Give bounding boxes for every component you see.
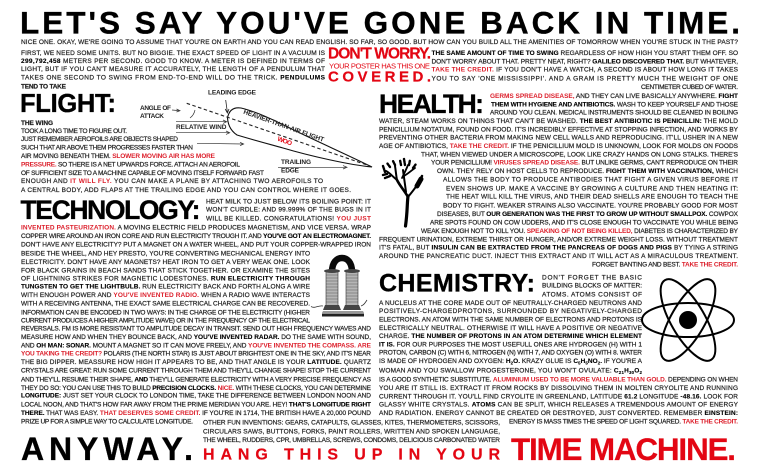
text block: health: OWN. THEY RELY ON HOST CELLS TO REPRODUCE. FIGHT THEM WITH VACCINATION, WHICH <box>437 168 738 175</box>
icon: penicillium mold <box>383 159 422 226</box>
text block: chemistry <box>379 275 739 426</box>
callout: don't worry <box>328 45 431 86</box>
text block: flight: THE WING <box>21 120 53 127</box>
label: angle of attack: ATTACK <box>140 113 164 120</box>
text block: chemistry: DON'T FORGET THE BASIC <box>542 275 642 282</box>
text block: units right: DON'T WORRY ABOUT THAT. PRETTY NEAT, RIGHT? GALILEO DISCOVERED THAT. BUT WHATEVER, <box>432 59 738 66</box>
text block: chemistry: POSITIVELY-CHARGEDPROTONS, SURROUNDED BY NEGATIVELY-CHARGED <box>379 308 642 315</box>
callout: don't worry: DON'T WORRY. <box>328 45 431 62</box>
text block: health: EVEN SHOWS UP. MAKE A VACCINE BY GROWING A CULTURE AND THEN HEATING IT: <box>446 185 738 192</box>
text block: chemistry: H <box>624 368 629 375</box>
label: relative wind: RELATIVE WIND <box>176 124 227 131</box>
intro line: NICE ONE. OKAY, WE'RE GOING TO ASSUME THAT YOU'RE ON EARTH AND YOU CAN READ ENGLISH. SO FAR, SO GOOD. BUT HOW CAN YOU BUILD ALL THE AMENITIES OF TOMORROW WHEN YOU'RE STUCK IN THE PAST? <box>21 39 738 46</box>
text block: chemistry: 30 <box>629 370 635 375</box>
text block: other fun inventions: THE WHEEL, RUDDERS, CPR, UMBRELLAS, SCREWS, CONDOMS, DELICIOUS CARBONATED WATER <box>203 437 500 444</box>
heading: health: HEALTH: <box>379 89 484 119</box>
text block: chemistry: ELECTRICALLY NEUTRAL. OTHERWISE IT WILL HAVE A POSITIVE OR NEGATIVE <box>379 325 643 332</box>
text block: units left: TAKES ONE SECOND TO SWING FROM END-TO-END WILL DO THE TRICK. PENDULUMS <box>21 75 326 82</box>
text block: technology <box>21 198 372 425</box>
label: trailing edge: TRAILING <box>281 159 311 166</box>
heading: flight: FLIGHT: <box>20 90 116 118</box>
label: trailing edge <box>281 159 311 175</box>
text block: technology: CURRENT PRODUCES A HIGHER AMPLITUDE WAVE) OR IN THE FREQUENCY OF THE ELECTRICAL <box>21 317 310 324</box>
text block: technology: REVERSALS. FM IS MORE RESISTANT TO AMPLITUDE DECAY IN TRANSIT. SEND OUT HIGH FREQUENCY WAVES AND <box>21 326 371 333</box>
text block: technology: WON'T CURDLE: AND 99.999% OF THE BUGS IN IT <box>206 207 371 214</box>
text block: units left: 299,792,458 METERS PER SECOND. GOOD TO KNOW. A METER IS DEFINED IN TERMS OF <box>21 58 325 65</box>
text block: technology: CRYSTALS ARE GREAT: RUN SOME CURRENT THROUGH THEM AND THEY'LL CHANGE SHAPE! STOP THE CURRENT <box>21 368 371 375</box>
text block: health: PENICILLIUM NOTATUM, FOUND ON FOOD. IT'S INCREDIBLY EFFECTIVE AT STOPPING INFECTION, AND WORKS BY <box>379 126 739 133</box>
text block: chemistry: IT IS. FOR OUR PURPOSES THE MOST USEFULL ONES ARE HYDROGEN (H) WITH 1 <box>379 341 642 348</box>
heading: chemistry: CHEMISTRY: <box>379 270 535 298</box>
footer: hang this up in your: HANG THIS UP IN YOUR <box>203 446 500 463</box>
text block: health: ARE SPOTS FOUND ON COW UDDERS, AND IT'S CLOSE ENOUGH TO VACCINATE YOU WHILE BEING <box>430 220 738 227</box>
text block: chemistry: PROTON, CARBON (C) WITH 6, NITROGEN (N) WITH 7, AND OXYGEN (O) WITH 8. WATER <box>379 350 642 357</box>
text block: technology: BESIDE THE WHEEL, AND HEY PRESTO, YOU'RE CONVERTING MECHANICAL ENERGY INTO <box>21 251 310 258</box>
text block: technology: AND OH MAN: SONAR. MOUNT A MAGNET SO IT CAN MOVE FREELY, AND YOU'VE INVENTED THE COMPASS. ARE <box>21 342 372 349</box>
label: heavier-than-air flight: HEAVIER-THAN-AIR FLIGHT <box>242 109 325 144</box>
text block: health: THEM WITH HYGIENE AND ANTIBIOTICS. WASH TO KEEP YOURSELF AND THOSE <box>491 101 739 108</box>
text block: health: GERMS SPREAD DISEASE, AND THEY CAN LIVE BASICALLY ANYWHERE. FIGHT <box>490 93 738 100</box>
text block: units right: CENTIMETER CUBED OF WATER. <box>641 84 738 91</box>
text block: flight: JUST REMEMBER AEROFOILS ARE OBJECTS SHAPED <box>21 136 178 143</box>
text block: chemistry: ATOMS. ATOMS CONSIST OF <box>542 291 642 298</box>
text block: technology: HEAT MILK TO JUST BELOW ITS BOILING POINT: IT <box>206 198 371 205</box>
text block: units right <box>432 50 739 91</box>
text block: other fun inventions: OTHER FUN INVENTIONS: GEARS, CATAPULTS, GLASSES, KITES, THERMOMETERS, SCISSORS, <box>203 420 500 427</box>
text block: chemistry: YOU ARE IT STILL IS. EXTRACT IT FROM ROCKS BY DISSOLVING THEM IN MOLTEN CRYOLITE AND RUNNING <box>379 385 738 392</box>
text block: chemistry: IS A GOOD SYNTHETIC SUBSTITUTE. ALUMINIUM USED TO BE MORE VALUABLE THAN GOLD. DEPENDING ON WHEN <box>379 377 738 384</box>
text block: chemistry: H <box>581 358 586 365</box>
text block: units right: TAKE THE CREDIT. IF YOU DON'T HAVE A WATCH, A SECOND IS ABOUT HOW LONG IT TAKES <box>432 67 739 74</box>
text block: technology: AND THEY'LL RESUME THEIR SHAPE, AND THEY'LL GENERATE ELECTRICITY WITH A VERY PRECISE FREQUENCY AS <box>21 376 372 383</box>
text block: health: ALLOWS THE BODY TO PRODUCE ANTIBODIES THAT FIGHT A GIVEN VIRUS BEFORE IT <box>443 176 738 183</box>
text block: health: THAT, WHEN VIEWED UNDER A MICROSCOPE, LOOK LIKE CRAZY HANDS ON LONG STALKS. THERE'S <box>421 151 739 158</box>
text block: technology: FOR BLACK GRAINS IN BEACH SANDS THAT STICK TOGETHER. OR EXAMINE THE SITES <box>21 267 311 274</box>
label: woo: WOO <box>276 136 293 148</box>
text block: health: WEAK ENOUGH NOT TO KILL YOU. SPEAKING OF NOT BEING KILLED, DIABETES IS CHARACTERIZED BY <box>421 228 739 235</box>
text block: technology: INVENTED PASTEURIZATION. A MOVING ELECTRIC FIELD PRODUCES MAGNETISM, AND VICE VERSA. WRAP <box>21 225 371 232</box>
text block: chemistry: KRAZY GLUE IS C <box>522 358 578 365</box>
text block: chemistry: . <box>600 358 602 365</box>
label: leading edge: LEADING EDGE <box>208 90 257 97</box>
text block: chemistry: O <box>634 368 639 375</box>
text block: technology: WITH ENOUGH POWER AND YOU'VE INVENTED RADIO. WHEN A RADIO WAVE INTERACTS <box>21 292 311 299</box>
text block: units left: TEND TO TAKE <box>21 83 67 90</box>
callout: don't worry: YOUR POSTER HAS THIS ONE <box>329 61 430 70</box>
text block: chemistry: O. <box>513 358 520 365</box>
text block: health: WATER, STEAM WORKS ON THINGS THAT CAN'T BE WASHED. THE BEST ANTIBIOTIC IS PENICILLIN: THE MOLD <box>379 118 738 125</box>
icon: electromagnet <box>311 258 367 316</box>
text block: chemistry: 5 <box>578 360 581 365</box>
text block: technology: THE BIG DIPPER. MEASSURE HOW HIGH IT APPEARS TO BE, AND THAT ANGLE IS YOUR LATITUDE. QUARTZ <box>21 359 371 366</box>
text block: flight: PRESSURE. SO THERE IS A NET UPWARDS FORCE. ATTACH AN AEROFOIL <box>21 161 240 168</box>
text block: technology: LOCAL NOON, AND THAT'S HOW FAR AWAY FROM THE PRIME MERIDIAN YOU ARE. HEY! THAT'S LONGITUDE RIGHT <box>21 401 371 408</box>
text block: technology: INFORMATION CAN BE ENCODED IN TWO WAYS: IN THE CHARGE OF THE ELECTRICITY (HIGHER <box>21 309 310 316</box>
label: angle of attack <box>140 105 171 120</box>
text block: technology: TUNGSTEN TO GET THE LIGHTBULB. RUN ELECTRICITY BACK AND FORTH ALONG A WIRE <box>21 284 311 291</box>
text block: flight <box>21 120 351 194</box>
text block: chemistry: AND RADIATION. ENERGY CANNOT BE CREATED OR DESTROYED, JUST CONVERTED. REMEMBER EINSTEIN: <box>379 410 738 417</box>
text block: chemistry: 5 <box>585 360 588 365</box>
text block: chemistry: 21 <box>619 370 624 375</box>
text block: chemistry: 2 <box>511 360 514 365</box>
text block: health: BODY TO FIGHT. WEAKER STRAINS ALSO VACCINATE. YOU'RE PROBABLY GOOD FOR MOST <box>443 202 738 209</box>
text block: health: AGE OF ANTIBIOTICS, TAKE THE CREDIT. IF THE PENICILLIUM MOLD IS UNKNOWN, LOOK FOR MOLDS ON FOODS <box>379 143 739 150</box>
text block: flight: SUCH THAT AIR ABOVE THEM PROGRESSES FASTER THAN <box>21 144 193 152</box>
text block: units right: THE SAME AMOUNT OF TIME TO SWING REGARDLESS OF HOW HIGH YOU START THEM OFF. SO <box>432 50 738 57</box>
text block: technology: YOU TAKING THE CREDIT? POLARIS (THE NORTH STAR) IS JUST ABOUT BRIGHTEST ONE IN THE SKY, AND IT'S NEAR <box>21 351 371 358</box>
label: angle of attack: ANGLE OF <box>140 105 171 112</box>
footer: anyway: ANYWAY. <box>21 431 193 467</box>
icon: atom <box>642 272 734 368</box>
text block: chemistry: 2 <box>598 360 601 365</box>
text block: chemistry: CURRENT THROUGH IT. YOU'LL FIND CRYOLITE IN GREENLAND, LATITUDE 61.2 LONGITUDE -48.16. LOOK FOR <box>379 393 738 400</box>
text block: health: PREVENTING OTHER BACTERIA FROM MAKING NEW CELL WALLS AND REPRODUCING. IT'LL USHER IN A NEW <box>379 135 739 142</box>
text block: health: AROUND THE PANCREATIC DUCT. INJECT THIS EXTRACT AND IT WILL ACT AS A MIRACULOUS TREATMENT. <box>379 253 738 260</box>
text block: technology: WITH A RECEIVING ANTENNA, THE EXACT SAME ELECTRICAL CHARGE CAN BE RECOVERED. <box>21 301 310 308</box>
text block: health: FORGET BANTING AND BEST. TAKE THE CREDIT. <box>592 262 738 269</box>
text block: flight: ENOUGH AND IT WILL FLY. YOU CAN MAKE A PLANE BY ATTACHING TWO AEROFOILS TO <box>21 178 323 185</box>
text block: technology: OF LIGHTNING STRIKES FOR MAGNETIC LODESTONES. RUN ELECTRICITY THROUGH <box>21 276 310 283</box>
text block: chemistry: ENERGY IS MASS TIMES THE SPEED OF LIGHT SQUARED. TAKE THE CREDIT. <box>509 419 738 426</box>
text block: chemistry: ELECTRONS. AN ATOM WITH THE SAME NUMBER OF ELECTRONS AND PROTONS IS <box>379 316 643 323</box>
text block: technology: WILL BE KILLED. CONGRATULATIONS! YOU JUST <box>206 216 371 223</box>
text block: flight: OF SUFFICIENT SIZE TO A MACHINE CAPABLE OF MOVING ITSELF FORWARD FAST <box>21 170 264 177</box>
text block: health: FREQUENT URINATION, EXTREME THIRST OR HUNGER, AND/OR EXTREME WEIGHT LOSS. WITHOUT TREATMENT <box>379 236 738 243</box>
text block: technology: THERE. THAT WAS EASY. THAT DESERVES SOME CREDIT. IF YOU'RE IN 1714, THE BRITISH HAVE A 20,000 POUND <box>21 410 371 417</box>
text block: chemistry: BUILDING BLOCKS OF MATTER: <box>542 283 642 290</box>
text block: technology: MEASURE HOW AND WHEN THEY BOUNCE BACK, AND YOU'VE INVENTED RADAR. DO THE SAME WITH SOUND, <box>21 334 371 341</box>
text block: flight: AIR MOVING BENEATH THEM. SLOWER MOVING AIR HAS MORE <box>21 153 216 160</box>
diagram: aerofoil <box>140 90 372 175</box>
label: trailing edge: EDGE <box>281 168 300 175</box>
text block: technology: COPPER WIRE AROUND AN IRON CORE AND RUN ELECTRICITY TROUGH IT. AND YOU'VE GOT AN ELECTROMAGNET. <box>21 233 371 240</box>
text block: units left: FIRST, WE NEED SOME UNITS. BUT NO BIGGIE. THE EXACT SPEED OF LIGHT IN A VACUUM IS <box>21 50 326 57</box>
text block: technology: THEY DO SO: YOU CAN USE THIS TO BUILD PRECISION CLOCKS. NICE. WITH THESE CLOCKS, YOU CAN DETERMINE <box>21 385 372 392</box>
text block: health <box>379 93 739 269</box>
text block: health: YOUR PENICILLIUM! VIRUSES SPREAD DISEASE. BUT UNLIKE GERMS, CAN'T REPRODUCE ON THEIR <box>431 160 738 167</box>
text block: technology: PRIZE UP FOR A SIMPLE WAY TO CALCULATE LONGITUDE. <box>21 418 193 425</box>
text block: health: IT'S FATAL, BUT INSULIN CAN BE EXTRACTED FROM THE PANCREAS OF DOGS AND PIGS BY TYING A STRING <box>379 245 738 252</box>
text block: units right: YOU TO SAY 'ONE MISSISSIPPI'. AND A GRAM IS PRETTY MUCH THE WEIGHT OF ONE <box>432 76 739 83</box>
text block: units left: LIGHT, BUT IF YOU CAN'T MEASURE IT ACCURATELY, THE LENGTH OF A PENDULUM THAT <box>21 66 325 73</box>
text block: flight: A CENTRAL BODY, ADD FLAPS AT THE TRAILING EDGE AND YOU CAN CONTROL WHERE IT GOES. <box>21 187 351 194</box>
text block: units left <box>21 50 326 90</box>
text block: chemistry: IF YOU'RE A <box>604 358 642 365</box>
text block: other fun inventions <box>203 420 500 444</box>
text block: health: DISEASES, BUT OUR GENERATION WAS THE FIRST TO GROW UP WITHOUT SMALLPOX. COWPOX <box>437 211 739 218</box>
title: LET'S SAY YOU'VE GONE BACK IN TIME. <box>20 4 740 40</box>
text block: technology: ELECTRICITY. DON'T HAVE ANY MAGNETS? HEAT IRON TO GET A VERY WEAK ONE. LOOK <box>21 259 311 266</box>
text block: health: THE HEAT WILL KILL THE VIRUS, AND THEIR DEAD SHELLS ARE ENOUGH TO TEACH THE <box>446 194 739 201</box>
text block: health: AROUND YOU CLEAN. MEDICAL INSTRUMENTS SHOULD BE CLEANED IN BOILING <box>490 110 738 117</box>
text block: flight: TOOK A LONG TIME TO FIGURE OUT. <box>21 128 127 135</box>
text block: chemistry: CHARGE. THE NUMBER OF PROTONS IN AN ATOM DETERMINE WHICH ELEMENT <box>379 333 642 340</box>
text block: chemistry: GLASSY WHITE CRYSTALS. ATOMS CAN BE SPLIT, WHICH RELEASES A TREMENDOUS AMOUNT OF ENERGY <box>379 402 739 409</box>
callout: don't worry: COVERED. <box>328 69 431 86</box>
text block: chemistry: NO <box>588 358 598 365</box>
heading: technology: TECHNOLOGY: <box>20 195 200 225</box>
text block: chemistry: 2 <box>640 370 643 375</box>
text block: other fun inventions: CIRCULARS SAWS, BUTTONS, FORKS, PAINT ROLLERS, WRITTEN AND SPOKEN LANGUAGE, <box>203 428 500 435</box>
text block: technology: DON'T HAVE ANY ELECTRICITY? PUT A MAGNET ON A WATER WHEEL, AND PUT YOUR COPPER-WRAPPED IRON <box>21 242 371 249</box>
text block: technology: LONGITUDE: JUST SET YOUR CLOCK TO LONDON TIME, TAKE THE DIFFERENCE BETWEEN LONDON NOON AND <box>21 393 371 400</box>
text block: chemistry: WOMAN AND YOU SWALLOW PROGESTERONE, YOU WON'T OVULATE: C <box>379 368 619 375</box>
footer: time machine: TIME MACHINE. <box>511 431 736 467</box>
text block: chemistry: A NUCLEUS AT THE CORE MADE OUT OF NEUTRALLY-CHARGED NEUTRONS AND <box>379 300 642 307</box>
text block: chemistry: IS MADE OF HYDROGEN AND OXYGEN: H <box>379 358 511 365</box>
